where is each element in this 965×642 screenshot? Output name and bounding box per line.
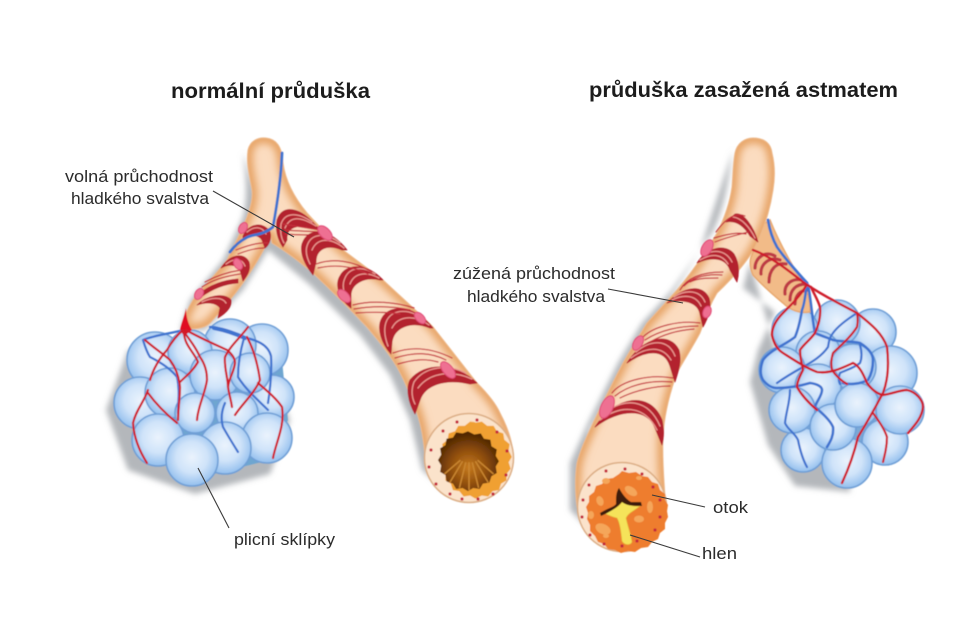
label: free passage of smooth muscle bbox=[65, 168, 294, 237]
tube shadow bbox=[570, 150, 850, 530]
label: swelling bbox=[652, 495, 749, 517]
label: free passage of smooth muscle: hladkého svalstva bbox=[71, 190, 210, 208]
label: swelling: otok bbox=[713, 499, 749, 517]
label: narrowed passage of smooth muscle bbox=[453, 265, 683, 306]
label: alveoli: plicní sklípky bbox=[234, 531, 336, 549]
bronchus tube bbox=[182, 138, 513, 458]
illustration: asthmatic bronchus bbox=[570, 138, 924, 553]
alveoli cluster bbox=[759, 300, 924, 488]
heading: normal bronchus: normální průduška bbox=[171, 79, 371, 103]
cut end with swelling and mucus bbox=[578, 462, 668, 553]
label: free passage of smooth muscle: volná průchodnost bbox=[65, 168, 213, 186]
lower branch tube bbox=[750, 220, 810, 313]
illustration: normal bronchus bbox=[106, 138, 514, 502]
label: narrowed passage of smooth muscle: hladkého svalstva bbox=[467, 288, 606, 306]
label: mucus bbox=[630, 535, 737, 563]
blood vessels bbox=[753, 220, 923, 483]
blood vessels bbox=[133, 153, 283, 463]
label: mucus: hlen bbox=[702, 545, 737, 563]
muscle bands bbox=[193, 210, 477, 414]
cut end of tube bbox=[424, 414, 514, 502]
alveoli cluster bbox=[114, 319, 294, 486]
label: alveoli bbox=[198, 468, 336, 549]
label: narrowed passage of smooth muscle: zúžená průchodnost bbox=[453, 265, 615, 283]
tube shadow bbox=[106, 153, 445, 494]
muscle bands bbox=[595, 214, 808, 445]
bronchus tube bbox=[576, 138, 774, 507]
heading: asthmatic bronchus: průduška zasažená astmatem bbox=[589, 78, 898, 102]
